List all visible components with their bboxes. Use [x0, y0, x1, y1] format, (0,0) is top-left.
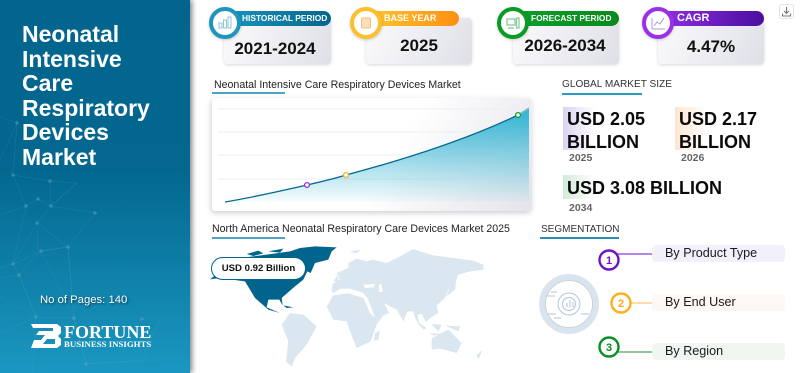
callout: USD 0.92 Billion — [222, 263, 295, 274]
header pill — [366, 11, 459, 26]
kpi: forecast period — [496, 6, 620, 66]
kpi: base year — [348, 6, 474, 66]
icon ring — [497, 7, 529, 39]
title: Neonatal — [22, 21, 119, 47]
logo — [31, 322, 151, 349]
stat: 2026 — [675, 107, 757, 164]
connector and badge: 1 — [606, 255, 612, 267]
segment: by end user — [610, 292, 785, 314]
heading: market chart: Neonatal Intensive Care Respiratory Devices Market — [214, 79, 461, 91]
card — [658, 18, 764, 64]
tint — [563, 107, 595, 150]
icon ring — [209, 7, 241, 39]
connector and badge: 2 — [618, 298, 624, 310]
icon: segmentation hub — [539, 274, 599, 334]
panel: area chart — [212, 98, 532, 211]
tint — [675, 107, 707, 150]
connector and badge: 3 — [606, 342, 612, 354]
value: 2025 — [400, 36, 438, 55]
chart — [218, 108, 530, 203]
value: 4.47% — [687, 37, 735, 56]
value: USD 2.05 BILLION — [567, 109, 645, 152]
icon ring — [350, 7, 382, 39]
label — [652, 343, 785, 360]
network pattern — [0, 117, 160, 373]
title — [22, 21, 150, 170]
sidebar panel — [0, 0, 190, 373]
header pill: FORECAST PERIOD — [531, 13, 612, 23]
label: By Region — [665, 344, 723, 358]
year: 2026 — [681, 152, 704, 164]
card — [366, 18, 472, 64]
stat: 2034 — [563, 175, 722, 214]
logo wordmark: FORTUNE — [64, 322, 151, 342]
title: Devices — [22, 119, 109, 145]
icon: logo mark — [31, 324, 61, 348]
stat: 2025 — [563, 107, 645, 164]
title: Market — [22, 144, 96, 170]
segment: by region — [598, 336, 785, 360]
connector and badge — [598, 249, 652, 271]
title: Intensive — [22, 46, 122, 72]
label: By End User — [665, 295, 736, 309]
value: 2026-2034 — [524, 36, 606, 55]
header pill: HISTORICAL PERIOD — [242, 13, 327, 23]
header pill — [513, 11, 619, 26]
kpi: historical period — [208, 6, 332, 66]
callout — [211, 257, 306, 280]
year: 2034 — [569, 202, 592, 214]
tint — [563, 175, 595, 199]
card — [224, 18, 331, 64]
page count: No of Pages: 140 — [40, 294, 127, 306]
icon: download — [779, 4, 794, 19]
label — [652, 245, 785, 262]
connector and badge — [610, 292, 652, 314]
value: USD 2.17 BILLION — [679, 109, 757, 152]
value: USD 3.08 BILLION — [567, 178, 722, 198]
kpi: cagr — [640, 6, 766, 66]
heading: north america map: North America Neonatal Respiratory Care Devices Market 2025 — [212, 223, 510, 235]
title: Respiratory — [22, 95, 150, 121]
label: By Product Type — [665, 246, 757, 260]
card — [513, 18, 619, 64]
heading: global market size: GLOBAL MARKET SIZE — [562, 79, 672, 90]
title: Care — [22, 70, 73, 96]
icon ring — [642, 7, 674, 39]
label — [652, 294, 785, 311]
header pill — [658, 11, 764, 26]
connector and badge — [598, 336, 652, 358]
logo subtitle: BUSINESS INSIGHTS — [64, 339, 151, 349]
heading: segmentation: SEGMENTATION — [541, 224, 620, 235]
year: 2025 — [569, 152, 592, 164]
segment: by product type — [598, 245, 785, 271]
header pill: BASE YEAR — [384, 13, 436, 23]
value: 2021-2024 — [234, 39, 316, 58]
header pill: CAGR — [677, 12, 709, 24]
header pill — [229, 11, 331, 26]
world map — [210, 246, 484, 366]
